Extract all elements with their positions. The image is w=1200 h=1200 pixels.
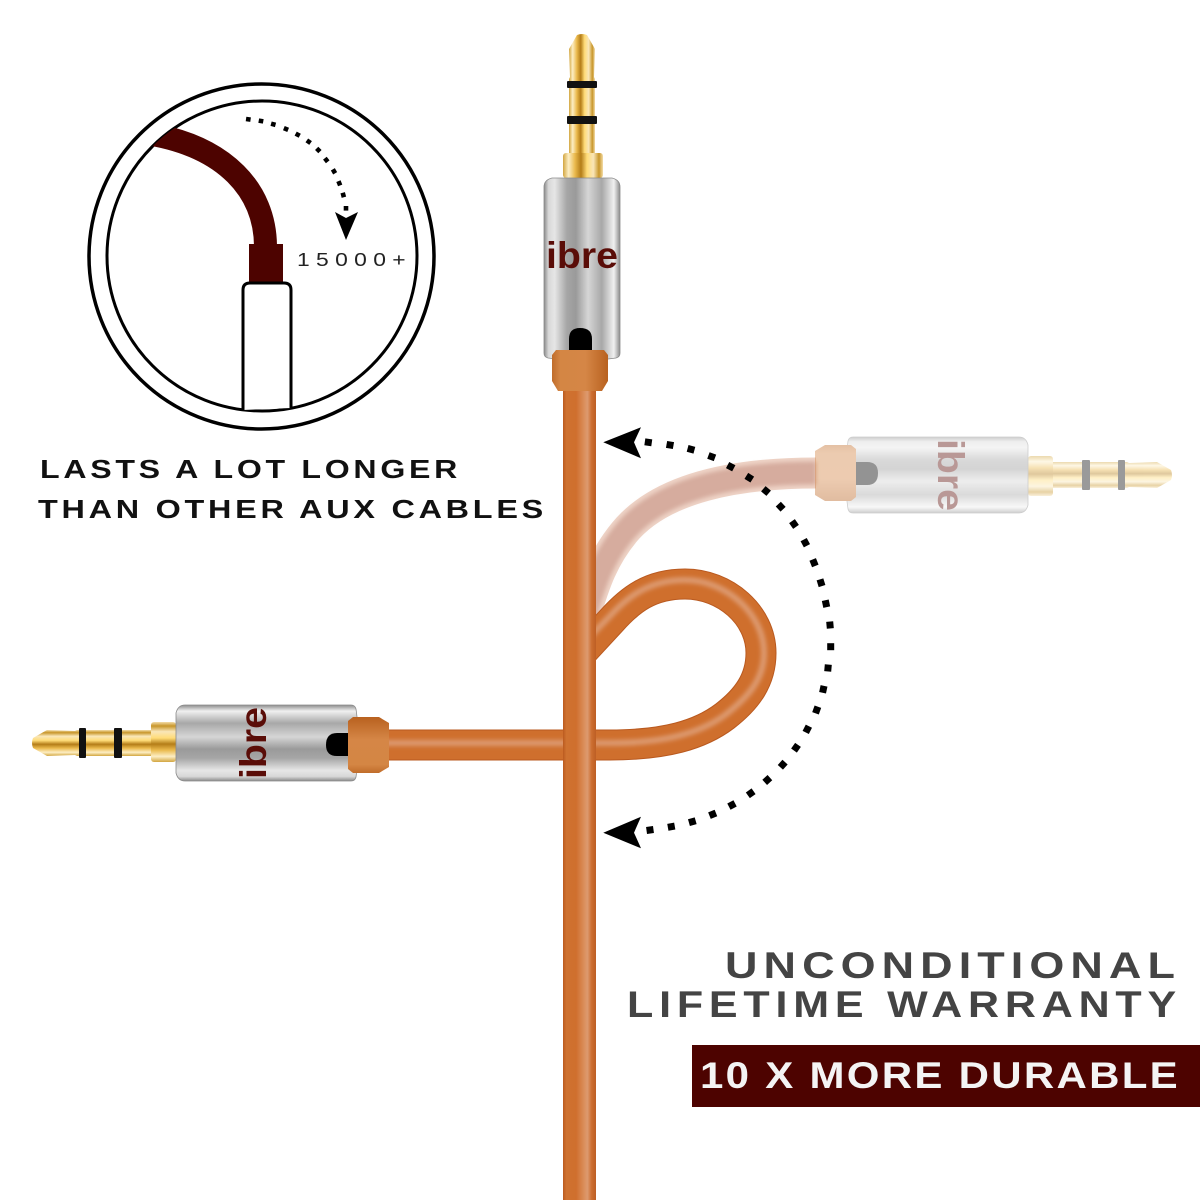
faded cable: original position [585,473,816,615]
heading: unconditional lifetime warranty: UNCONDITIONAL [725,945,1181,986]
heading: unconditional lifetime warranty: LIFETIME WARRANTY [627,984,1182,1025]
faded plug: right: ibre [930,439,971,511]
plug outline [243,283,291,410]
orange cable: loop [385,580,764,745]
orange cable: vertical [563,380,596,1200]
heading: lasts a lot longer: LASTS A LOT LONGER [40,454,461,484]
faded plug: right [815,437,1172,513]
label: 15000+: 15000+ [297,250,412,270]
banner: 10 x more durable [692,1045,1200,1107]
heading: lasts a lot longer: THAN OTHER AUX CABLES [38,494,547,524]
gold and silver plug: left [32,705,389,781]
heading: lasts a lot longer [38,454,547,524]
gold and silver plug: top [544,34,620,391]
heading: unconditional lifetime warranty [627,945,1182,1025]
small dotted arrow [246,117,358,240]
gold and silver plug: left: ibre [233,707,274,779]
banner: 10 x more durable: 10 X MORE DURABLE [700,1055,1180,1096]
bent cable [150,134,283,283]
circle badge: bend detail [89,84,434,429]
gold and silver plug: top: ibre [546,235,618,276]
badge rings [89,84,434,429]
dotted arrow: bend range [603,427,834,848]
